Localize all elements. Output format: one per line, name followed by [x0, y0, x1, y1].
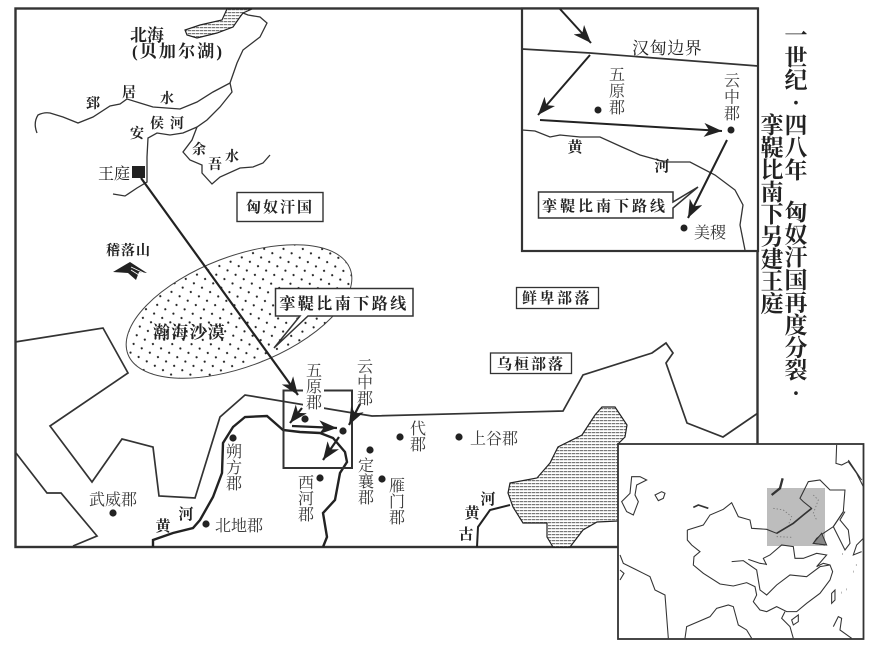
title: vertical heading column 1: 汗 — [784, 245, 808, 270]
callout: route label — [274, 288, 413, 348]
Yellow River in inset — [522, 130, 745, 250]
locator coastlines and borders — [620, 445, 863, 638]
title: vertical heading column 1: 世 — [784, 46, 808, 70]
commandery labels: 原 — [306, 378, 322, 396]
locator frame — [618, 444, 864, 639]
desert: Hanhai — [108, 218, 370, 405]
commandery labels: 门 — [389, 493, 405, 511]
title: vertical heading column 2 — [760, 112, 784, 316]
inset callout: 挛鞮比南下路线 — [542, 197, 668, 215]
label and icon: Jiluo mountain: 稽落山 — [106, 242, 151, 259]
river labels: 水 — [225, 149, 239, 165]
panel: main map — [15, 8, 758, 547]
river labels: Yellow River: 黄 — [464, 504, 481, 522]
border line — [522, 49, 758, 66]
river labels: 吾 — [208, 156, 222, 173]
river labels: Yellow River: 河 — [480, 491, 496, 508]
title: vertical heading column 2: 另 — [760, 224, 784, 250]
box: Wuhuan tribes: 乌桓部落 — [497, 355, 565, 373]
inset place labels — [609, 66, 740, 242]
river labels in inset: 河 — [654, 158, 670, 175]
river labels: 河 — [170, 116, 184, 132]
river labels — [86, 85, 239, 173]
title: vertical heading column 2: 建 — [760, 247, 784, 272]
inset place labels: 云 — [724, 72, 740, 90]
title: vertical heading column 2: 下 — [760, 202, 784, 227]
commandery labels: 朔 — [226, 443, 242, 461]
commandery labels: 河 — [298, 490, 314, 508]
label: Han-Xiongnu border: 汉匈边界 — [632, 39, 702, 58]
label: royal court: 王庭 — [98, 165, 130, 183]
commandery labels: 郡 — [226, 475, 242, 493]
Han-Xiongnu border — [15, 328, 758, 546]
desert: Hanhai: 瀚海沙漠 — [153, 322, 226, 342]
title: vertical heading column 1: 匈 — [784, 200, 808, 225]
title: vertical heading column 1: 分 — [784, 336, 808, 361]
commandery dots — [109, 415, 463, 528]
river labels: 居 — [122, 85, 136, 101]
highlighted area — [767, 488, 825, 546]
title: vertical heading column 2: 南 — [760, 180, 784, 205]
river: Yuwu — [183, 127, 270, 184]
title: vertical heading column 1: 奴 — [784, 223, 808, 248]
river labels in inset — [567, 138, 670, 175]
commandery labels: 西 — [298, 474, 314, 492]
commandery labels: 郡 — [410, 436, 426, 454]
label: Beihai — [130, 26, 222, 61]
title: vertical heading column 1: 四 — [784, 113, 808, 138]
panel: locator map — [618, 444, 864, 639]
commandery labels: 郡 — [298, 506, 314, 524]
river labels in inset: 黄 — [567, 138, 584, 156]
river labels: 水 — [160, 91, 174, 107]
title: vertical heading column 2: 鞮 — [760, 135, 784, 160]
river labels: Yellow River: 古 — [458, 525, 474, 543]
inset place labels: 五 — [609, 66, 625, 84]
box: Xiongnu Khanate: 匈奴汗国 — [246, 198, 314, 216]
title: vertical heading column 1 — [784, 23, 808, 406]
panel: detail inset — [522, 8, 758, 251]
inset place labels: 原 — [609, 82, 625, 100]
commandery labels: 郡 — [306, 394, 322, 412]
inset outline on main map — [284, 390, 352, 468]
river: Anhou — [113, 83, 232, 196]
title: vertical heading column 1: 裂 — [784, 358, 808, 383]
inset place labels: 美稷 — [694, 224, 727, 242]
route arrows: Bi's southward march — [141, 178, 360, 460]
label: Beihai: 北海 — [130, 26, 164, 45]
lake: Baikal — [185, 9, 252, 38]
sea: Bohai — [508, 407, 640, 547]
title: vertical heading column 1: · — [792, 90, 800, 116]
title: vertical heading column 1: 国 — [784, 268, 808, 293]
box: Xianbei tribes — [516, 288, 598, 308]
commandery labels: 定 — [358, 457, 374, 475]
river labels: Yellow River: 黄 — [155, 517, 172, 535]
title: vertical heading column 1: 纪 — [784, 68, 808, 93]
river labels: 郅 — [86, 96, 100, 112]
inset frame — [522, 8, 758, 251]
river: Zhiju — [35, 13, 267, 133]
title: vertical heading column 2: 王 — [760, 269, 784, 294]
title: vertical heading column 1: · — [792, 381, 800, 406]
commandery labels: 中 — [357, 374, 373, 392]
callout: route label: 挛鞮比南下路线 — [279, 294, 409, 313]
commandery labels: 五 — [306, 362, 322, 380]
river labels: Yellow River — [155, 491, 496, 543]
river labels: 安 — [130, 126, 145, 142]
commandery labels: 郡 — [357, 390, 373, 408]
Yellow River west — [153, 416, 347, 547]
title: vertical heading column 1: 一 — [784, 23, 808, 48]
label: Beihai: (贝加尔湖) — [132, 41, 222, 61]
inset callout — [538, 187, 698, 218]
map frame — [16, 8, 758, 547]
commandery labels: 上谷郡 — [470, 430, 518, 448]
title: vertical heading column 1: 年 — [784, 157, 808, 183]
title: vertical heading column 1: 再 — [784, 290, 808, 315]
box: Wuhuan tribes — [490, 353, 572, 374]
commandery labels: 郡 — [358, 489, 374, 507]
inset place labels: 中 — [724, 88, 740, 106]
commandery labels: 代 — [410, 420, 426, 438]
title: vertical heading column 1: 八 — [784, 136, 808, 160]
river labels: Yellow River: 河 — [178, 506, 194, 523]
label: royal court — [98, 165, 145, 183]
box: Xiongnu Khanate — [237, 192, 323, 222]
commandery labels: 北地郡 — [215, 516, 263, 535]
inset dots — [594, 106, 734, 232]
commandery labels: 云 — [357, 358, 373, 376]
commandery labels: 郡 — [389, 509, 405, 527]
commandery labels — [89, 358, 518, 535]
commandery labels: 方 — [226, 459, 242, 477]
river labels: 侯 — [150, 115, 164, 132]
title: vertical heading column 1: 度 — [784, 312, 808, 338]
Yellow River east — [477, 505, 510, 547]
commandery labels: 雁 — [389, 477, 405, 495]
commandery labels: 襄 — [358, 473, 374, 491]
title: vertical heading column 2: 挛 — [760, 112, 784, 138]
commandery labels: 武威郡 — [89, 491, 137, 509]
box: Xianbei tribes: 鲜卑部落 — [522, 289, 592, 307]
river labels: 余 — [192, 141, 207, 158]
inset route arrows — [538, 9, 727, 218]
title: vertical heading column 2: 比 — [760, 158, 784, 183]
inset place labels: 郡 — [609, 99, 625, 117]
inset place labels: 郡 — [724, 105, 740, 123]
title: vertical heading column 2: 庭 — [760, 291, 784, 316]
label and icon: Jiluo mountain — [106, 242, 151, 280]
